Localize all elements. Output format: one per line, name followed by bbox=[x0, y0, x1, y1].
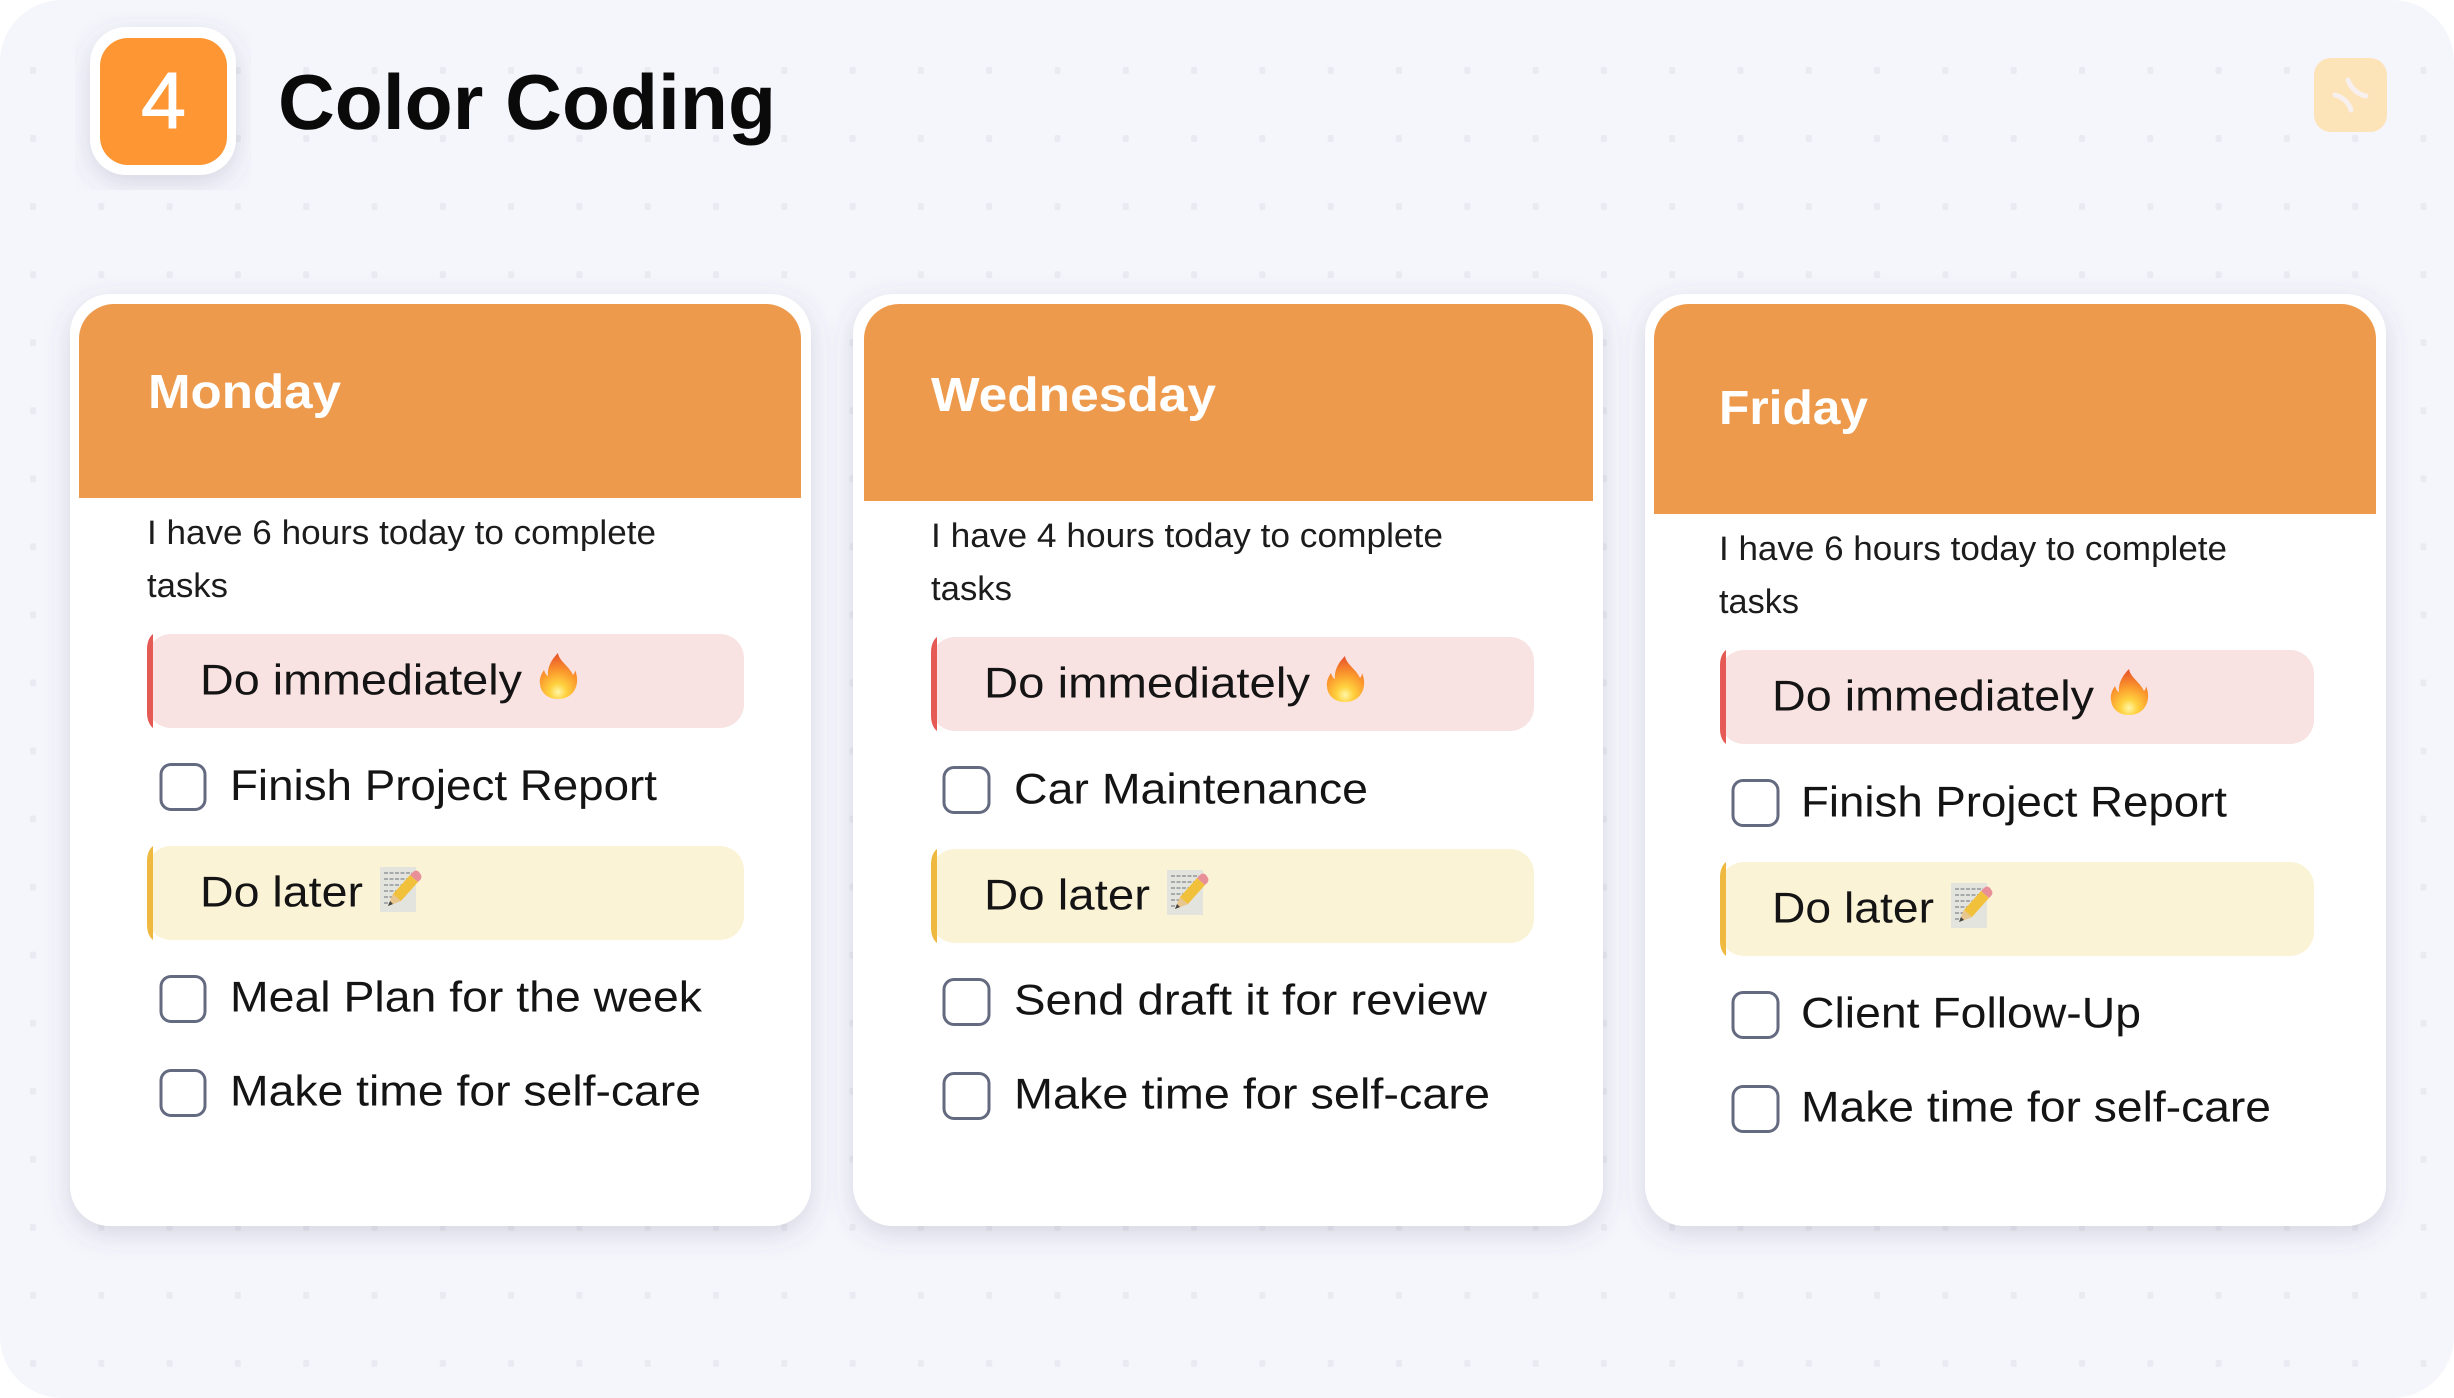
card background bbox=[70, 294, 811, 1226]
label: do later: Do later bbox=[200, 868, 363, 916]
heading: Friday bbox=[1719, 382, 1868, 435]
hours text: I have 6 hours today to complete bbox=[1719, 530, 2227, 568]
label: do immediately: Do immediately bbox=[984, 660, 1311, 708]
header band bbox=[79, 304, 801, 498]
label: do later bbox=[931, 849, 1534, 943]
label: do later: Do later bbox=[1772, 884, 1934, 932]
panel: Friday bbox=[1645, 294, 2386, 1226]
number badge: 4 bbox=[141, 56, 186, 145]
task: self-care: Make time for self-care bbox=[230, 1068, 701, 1116]
hours text: I have 6 hours today to complete bbox=[147, 514, 656, 552]
task: Car Maintenance: Car Maintenance bbox=[1014, 766, 1368, 814]
task: Meal Plan: Meal Plan for the week bbox=[230, 974, 703, 1022]
label: do later: Do later bbox=[984, 872, 1150, 920]
task: Send draft: Send draft it for review bbox=[1014, 976, 1488, 1024]
hours text: tasks bbox=[931, 570, 1012, 608]
panel: Wednesday bbox=[853, 294, 1603, 1226]
label: do later bbox=[147, 846, 744, 940]
icon: logo mark bbox=[2314, 58, 2387, 132]
task: Client Follow-Up: Client Follow-Up bbox=[1801, 990, 2141, 1038]
task: self-care: Make time for self-care bbox=[1801, 1084, 2271, 1132]
panel: Monday bbox=[70, 294, 811, 1226]
label: do later bbox=[1720, 862, 2314, 956]
title: Color Coding bbox=[278, 58, 776, 146]
heading: Monday bbox=[148, 366, 341, 419]
heading: Wednesday bbox=[931, 369, 1216, 422]
hours text: tasks bbox=[1719, 583, 1799, 621]
task: Finish Project Report: Finish Project Report bbox=[1801, 778, 2227, 826]
hours text: I have 4 hours today to complete bbox=[931, 517, 1443, 555]
hours text: tasks bbox=[147, 567, 228, 605]
label: do immediately bbox=[147, 634, 744, 728]
task: self-care: Make time for self-care bbox=[1014, 1070, 1490, 1118]
header band bbox=[864, 304, 1593, 501]
task: Finish Project Report: Finish Project Report bbox=[230, 762, 657, 810]
number badge bbox=[90, 27, 236, 175]
hours text bbox=[1719, 530, 2227, 621]
card background bbox=[853, 294, 1603, 1226]
label: do immediately bbox=[1720, 650, 2314, 744]
header band bbox=[1654, 304, 2376, 514]
card background bbox=[1645, 294, 2386, 1226]
hours text bbox=[931, 517, 1443, 608]
hours text bbox=[147, 514, 656, 605]
label: do immediately: Do immediately bbox=[200, 656, 523, 704]
label: do immediately bbox=[931, 637, 1534, 731]
label: do immediately: Do immediately bbox=[1772, 672, 2095, 720]
